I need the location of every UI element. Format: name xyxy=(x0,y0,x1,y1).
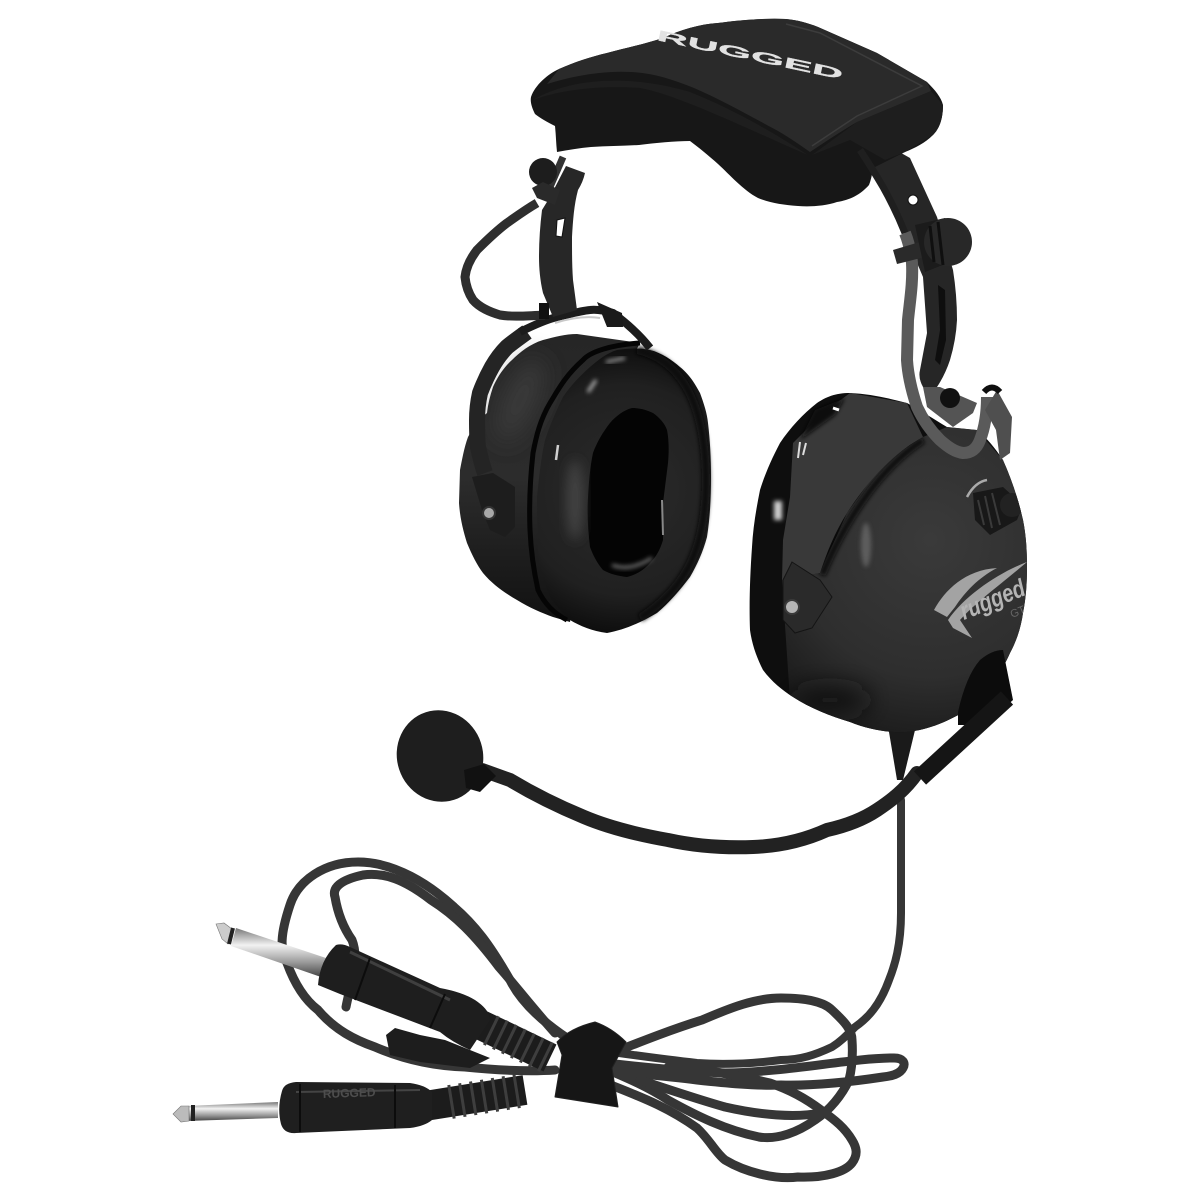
right clamp xyxy=(893,241,933,264)
left headband cable xyxy=(465,203,545,316)
left adjustment rod xyxy=(550,157,563,187)
volume knob xyxy=(967,480,1024,535)
small cable clip xyxy=(539,303,549,319)
microphone boom xyxy=(482,650,1013,847)
upper jack metal shaft xyxy=(231,928,326,977)
shell dark rim shading xyxy=(822,440,923,575)
yoke bracket xyxy=(923,387,977,427)
left cup screw xyxy=(483,507,495,519)
glossy cushion back xyxy=(750,393,1027,732)
boom gooseneck xyxy=(482,770,917,847)
gloss highlights xyxy=(774,408,839,520)
pad brand logo: RUGGED xyxy=(655,28,844,83)
headband pad xyxy=(531,19,943,206)
right adjustment knob xyxy=(924,218,972,266)
upper jack body xyxy=(318,944,490,1050)
left headband yoke arc xyxy=(520,302,650,348)
upper-left large cable loop xyxy=(282,862,567,1071)
product photo: aviation headset xyxy=(172,18,1027,1182)
main lead from ear cup xyxy=(612,800,901,1064)
left strap clamp xyxy=(532,182,560,205)
cable strain relief under ear cup xyxy=(888,726,916,780)
cable bundle xyxy=(282,800,904,1178)
inner cable loop xyxy=(334,874,555,1033)
cushion hole xyxy=(588,408,669,577)
boom rigid section xyxy=(920,698,1007,778)
right cup screw xyxy=(785,600,799,614)
strap long slot xyxy=(935,285,946,365)
velcro cable tie xyxy=(555,1022,626,1107)
left adjustment knob xyxy=(529,158,557,186)
inner lower cable xyxy=(640,1080,821,1115)
right cup pivot tab xyxy=(783,562,832,633)
left ear cup xyxy=(459,332,711,633)
right clamp and knob xyxy=(893,218,972,272)
pad top flap xyxy=(547,19,931,152)
left cup strap xyxy=(477,332,527,473)
pad body xyxy=(531,19,943,206)
left cup pivot tab xyxy=(472,473,515,537)
boom pivot xyxy=(958,650,1013,725)
yoke side clip xyxy=(985,390,1012,460)
ear cushion xyxy=(537,348,711,633)
velcro underside xyxy=(812,91,943,160)
lower jack metal shaft xyxy=(186,1102,278,1121)
brand lettering on lower jack: RUGGED xyxy=(323,1085,376,1101)
yoke bracket and bolt xyxy=(923,387,1012,460)
plug 1: upper jack xyxy=(216,923,552,1060)
mic collar xyxy=(464,764,496,792)
cup logo xyxy=(934,562,1030,638)
cup shell xyxy=(782,427,1030,740)
right gray headset cable xyxy=(860,150,987,453)
left cup back shell xyxy=(459,334,640,622)
lower jack body xyxy=(279,1082,432,1133)
middle small connector xyxy=(386,1028,490,1068)
cable end clip xyxy=(984,388,1000,392)
strap hole xyxy=(908,195,918,205)
logo swooshes xyxy=(934,568,997,617)
yoke bolt xyxy=(940,388,960,408)
lower jack strain relief xyxy=(425,1090,525,1106)
black seam ring xyxy=(530,343,640,620)
left headband strap xyxy=(529,157,585,319)
mic foam windscreen xyxy=(385,699,495,813)
lower cable loop xyxy=(606,1067,856,1178)
logo wordmark: rugged xyxy=(956,574,1030,626)
upper jack strain relief xyxy=(460,1015,550,1058)
plug 2: lower jack xyxy=(173,1082,525,1133)
strap slot xyxy=(556,218,565,237)
cup band xyxy=(782,393,923,580)
right cable loop xyxy=(600,1058,904,1085)
right ear cup xyxy=(750,393,1027,732)
logo sub-mark: GT xyxy=(1009,604,1028,621)
right headband strap xyxy=(860,137,957,387)
right upper cable loop xyxy=(601,998,852,1138)
cushion highlights xyxy=(556,358,663,567)
